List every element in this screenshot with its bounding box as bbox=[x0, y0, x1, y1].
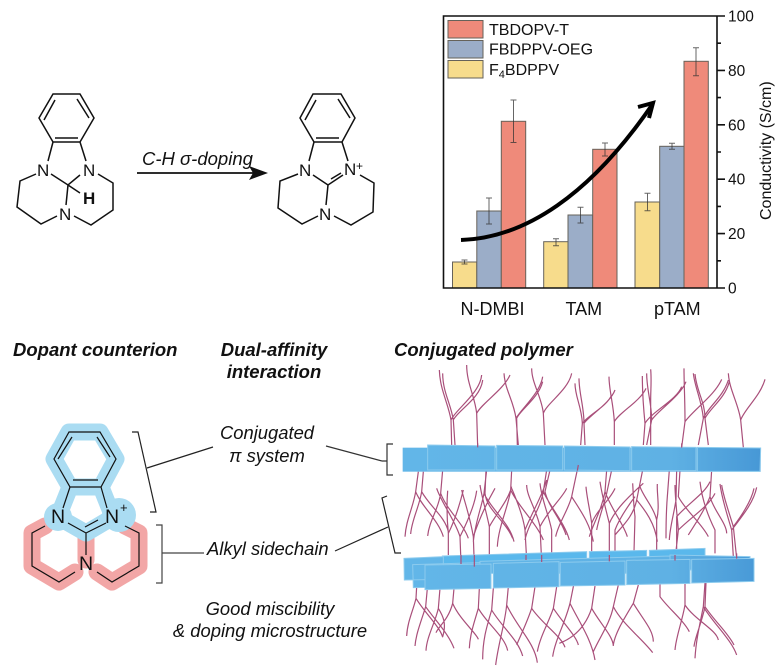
highlight: alkyl rings bbox=[32, 526, 139, 582]
y axis tick labels: 80 bbox=[728, 63, 746, 80]
molecule: neutral dopant bbox=[17, 94, 113, 225]
side chains: middle layer bbox=[405, 465, 757, 567]
molecule: neutral dopant: N bbox=[59, 205, 71, 224]
molecule: dopant counterion with highlights bbox=[32, 432, 139, 582]
legend: BDPPV bbox=[505, 62, 559, 79]
chains crossing bottom backbone bbox=[461, 553, 737, 567]
trend arrow bbox=[461, 103, 653, 240]
bars: pTAM bbox=[635, 61, 708, 288]
molecule: neutral dopant: N bbox=[83, 161, 95, 180]
bars: N-DMBI bbox=[452, 121, 526, 288]
label: conjugated pi system: π system bbox=[229, 445, 305, 466]
molecule: neutral dopant: N bbox=[37, 161, 49, 180]
heading: dual-affinity interaction: Dual-affinity bbox=[221, 339, 329, 360]
y axis tick labels: 100 bbox=[728, 8, 754, 26]
y axis title: Conductivity (S/cm) bbox=[758, 81, 775, 220]
axes frame bbox=[444, 16, 725, 288]
molecule: doped cation: N bbox=[299, 161, 311, 180]
legend: F bbox=[489, 62, 499, 79]
molecule: doped cation bbox=[278, 94, 374, 225]
heading: dopant counterion: Dopant counterion bbox=[13, 339, 177, 360]
y axis tick labels: 60 bbox=[728, 117, 746, 134]
x axis labels: pTAM bbox=[654, 299, 701, 319]
heading: dual-affinity interaction: interaction bbox=[227, 361, 321, 382]
x axis labels: N-DMBI bbox=[460, 299, 524, 319]
bracket: conjugated pi system bbox=[132, 432, 213, 512]
side chains: bottom layer bbox=[407, 583, 737, 665]
x axis labels bbox=[460, 299, 701, 319]
y axis tick labels bbox=[728, 8, 754, 298]
label: conjugated pi system: Conjugated bbox=[220, 422, 315, 443]
reaction arrow: C-H sigma doping: C-H σ-doping bbox=[142, 148, 254, 169]
skeletal bonds bbox=[32, 432, 139, 582]
highlight: conjugated system bbox=[54, 432, 116, 533]
legend: TBDOPV-T bbox=[489, 22, 569, 39]
polymer lamellae bbox=[403, 365, 765, 665]
bracket: pi stacking spacing bbox=[326, 444, 393, 475]
label: alkyl sidechain: Alkyl sidechain bbox=[206, 538, 329, 559]
bars: TAM bbox=[544, 149, 617, 288]
molecule: neutral dopant: H bbox=[83, 189, 95, 208]
molecule: dopant counterion with highlights: N bbox=[105, 506, 119, 528]
label: good miscibility: Good miscibility bbox=[206, 598, 336, 619]
polymer backbone: bottom bbox=[404, 548, 754, 590]
y axis tick labels: 20 bbox=[728, 226, 746, 243]
label: good miscibility: & doping microstructure bbox=[173, 620, 367, 641]
x axis labels: TAM bbox=[566, 299, 602, 319]
molecule: doped cation: N bbox=[319, 205, 331, 224]
heading: conjugated polymer: Conjugated polymer bbox=[394, 339, 575, 360]
legend bbox=[448, 20, 593, 81]
molecule: dopant counterion with highlights: N bbox=[79, 553, 93, 575]
y axis tick labels: 40 bbox=[728, 172, 746, 189]
error bars bbox=[462, 48, 699, 264]
side chains: top layer bbox=[439, 365, 765, 447]
legend: 4 bbox=[499, 69, 505, 81]
reaction arrow: C-H sigma doping bbox=[137, 148, 268, 180]
molecule: doped cation: N bbox=[344, 160, 356, 179]
y axis tick labels: 0 bbox=[728, 280, 737, 298]
chains crossing top backbone bbox=[478, 443, 682, 471]
legend: FBDPPV-OEG bbox=[489, 42, 593, 58]
molecule: dopant counterion with highlights: N bbox=[51, 506, 65, 528]
molecule: dopant counterion with highlights: + bbox=[120, 500, 128, 515]
polymer backbone: top bbox=[403, 445, 761, 472]
bracket: lamellar spacing bbox=[335, 496, 401, 553]
bar chart: conductivity bbox=[444, 8, 775, 319]
molecule: doped cation: + bbox=[356, 159, 363, 173]
bracket: alkyl sidechain bbox=[156, 525, 204, 583]
